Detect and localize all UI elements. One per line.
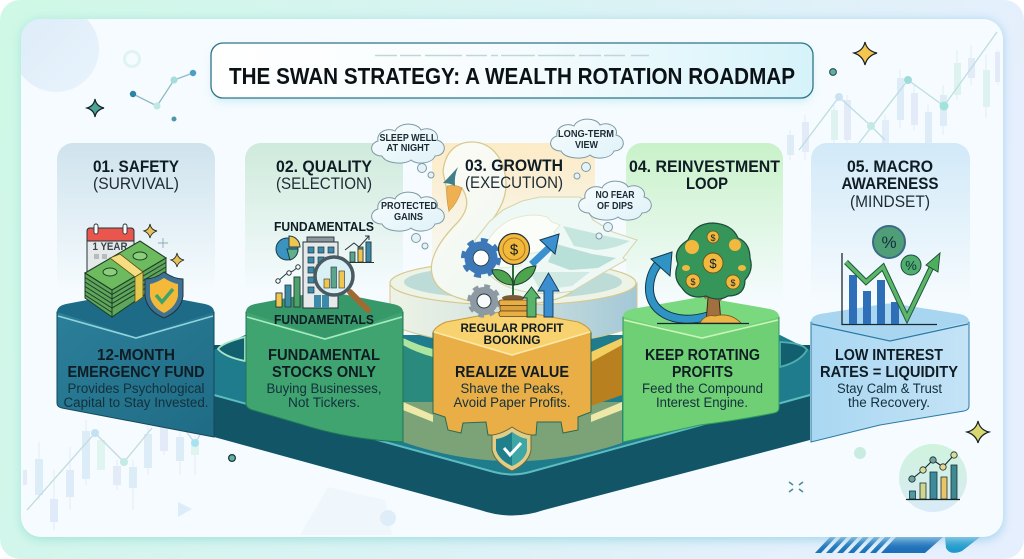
- text: fundamental stocks: STOCKS ONLY: [272, 364, 376, 381]
- heading: 05 macro: 05. MACRO: [847, 157, 933, 176]
- heading: 05 macro: (MINDSET): [850, 192, 930, 211]
- heading: 04 reinvestment: [629, 157, 781, 193]
- swan wing: [475, 197, 637, 293]
- text: realize value: Avoid Paper Profits.: [454, 395, 570, 410]
- heading: 03 growth: [465, 156, 563, 192]
- cloud: protected gains: [372, 192, 444, 249]
- icon: building, charts and magnifier: [274, 219, 374, 327]
- bottom-right corner stripes: [815, 537, 980, 553]
- text: emergency fund: EMERGENCY FUND: [68, 364, 204, 381]
- heading: 02 quality: [276, 157, 373, 193]
- pedestal: keep rotating: [623, 298, 779, 442]
- column 1: safety: [57, 157, 214, 437]
- swan: [431, 142, 637, 305]
- icon: money tree and loop arrow: $: [690, 277, 696, 287]
- icon: building, charts and magnifier: FUNDAMENTALS: [274, 219, 374, 234]
- icon: money tree and loop arrow: $: [730, 278, 736, 288]
- text: low interest rates: Stay Calm & Trust: [837, 381, 942, 396]
- column 3: growth: [433, 156, 591, 471]
- heading: 01 safety: 01. SAFETY: [93, 157, 180, 176]
- text: low interest rates: [820, 347, 958, 410]
- label: regular profit booking: REGULAR PROFIT: [460, 321, 564, 335]
- swan pool: [390, 261, 637, 345]
- text: emergency fund: [64, 347, 208, 410]
- icon: calendar, cash stack and shield: 1 YEAR: [92, 241, 128, 253]
- cloud: long-term view: LONG-TERM: [558, 129, 614, 140]
- label: regular profit booking: [460, 321, 564, 347]
- column 2: quality: [246, 157, 403, 442]
- cloud: long-term view: VIEW: [575, 140, 598, 151]
- heading: 02 quality: 02. QUALITY: [276, 157, 373, 176]
- pedestal: low interest rates: [811, 304, 969, 442]
- pedestal: emergency fund: [57, 292, 214, 437]
- icon: calendar, cash stack and shield: [85, 224, 184, 318]
- text: realize value: Shave the Peaks,: [460, 381, 564, 396]
- column header backgrounds: [57, 143, 970, 300]
- heading: 04 reinvestment: 04. REINVESTMENT: [629, 157, 781, 176]
- pedestal: realize value: [433, 310, 591, 435]
- text: realize value: [454, 364, 570, 410]
- cloud: no fear of dips: [579, 181, 651, 239]
- cloud: protected gains: GAINS: [394, 212, 423, 223]
- pedestal: fundamental stocks: [246, 292, 403, 442]
- text: emergency fund: 12-MONTH: [97, 347, 175, 364]
- cloud: sleep well at night: [372, 124, 444, 178]
- heading: 01 safety: [93, 157, 180, 193]
- text: fundamental stocks: FUNDAMENTAL: [268, 347, 380, 364]
- text: keep rotating: Interest Engine.: [656, 395, 748, 410]
- text: low interest rates: LOW INTEREST: [835, 347, 943, 364]
- swan beak: [447, 185, 462, 211]
- icon: shield with check: [492, 427, 531, 471]
- label: regular profit booking: BOOKING: [484, 333, 540, 347]
- text: fundamental stocks: Buying Businesses,: [266, 381, 382, 396]
- icon: money tree and loop arrow: $: [709, 256, 717, 271]
- cloud: protected gains: PROTECTED: [381, 201, 437, 212]
- heading: 05 macro: [842, 157, 938, 211]
- text: fundamental stocks: Not Tickers.: [288, 395, 360, 410]
- text: keep rotating: [642, 347, 763, 410]
- title text: THE SWAN STRATEGY: A WEALTH ROTATION ROADMAP: [229, 63, 795, 89]
- icon: rate chart with percent coins: %: [905, 258, 917, 273]
- mini bar chart icon: bottom right: [899, 444, 967, 512]
- icon: money tree and loop arrow: [649, 223, 751, 324]
- heading: 05 macro: AWARENESS: [842, 174, 938, 193]
- icon: building, charts and magnifier: FUNDAMENTALS: [274, 312, 374, 327]
- text: fundamental stocks: [266, 347, 382, 410]
- cloud: long-term view: [551, 119, 623, 179]
- candlestick chart: bottom left: [23, 420, 203, 530]
- text: low interest rates: RATES = LIQUIDITY: [820, 364, 958, 381]
- cloud: no fear of dips: OF DIPS: [597, 201, 633, 212]
- cloud: sleep well at night: AT NIGHT: [386, 143, 430, 154]
- heading: 04 reinvestment: LOOP: [686, 174, 728, 193]
- text: emergency fund: Capital to Stay Invested.: [64, 395, 208, 410]
- heading: 02 quality: (SELECTION): [276, 174, 372, 193]
- column 4: reinvestment loop: [623, 157, 781, 442]
- title banner: [211, 43, 813, 102]
- text: emergency fund: Provides Psychological: [68, 381, 204, 396]
- text: realize value: REALIZE VALUE: [455, 364, 569, 381]
- cloud: no fear of dips: NO FEAR: [596, 190, 635, 201]
- cloud: sleep well at night: SLEEP WELL: [380, 133, 436, 144]
- icon: growth plant, gears, coins and arrows: $: [510, 242, 519, 258]
- thought clouds: [372, 119, 651, 249]
- central platform base: [214, 335, 810, 516]
- icon: growth plant, gears, coins and arrows: [464, 234, 559, 317]
- column 5: macro awareness: [811, 157, 969, 442]
- heading: 03 growth: 03. GROWTH: [465, 156, 563, 175]
- icon: money tree and loop arrow: $: [710, 233, 716, 243]
- text: keep rotating: KEEP ROTATING: [645, 347, 760, 364]
- text: keep rotating: Feed the Compound: [642, 381, 763, 396]
- icon: rate chart with percent coins: [842, 226, 940, 324]
- text: low interest rates: the Recovery.: [848, 395, 930, 410]
- heading: 01 safety: (SURVIVAL): [93, 174, 179, 193]
- candlestick chart: top right: [787, 32, 1000, 160]
- icon: rate chart with percent coins: %: [881, 233, 897, 252]
- heading: 03 growth: (EXECUTION): [465, 173, 563, 192]
- text: keep rotating: PROFITS: [672, 364, 733, 381]
